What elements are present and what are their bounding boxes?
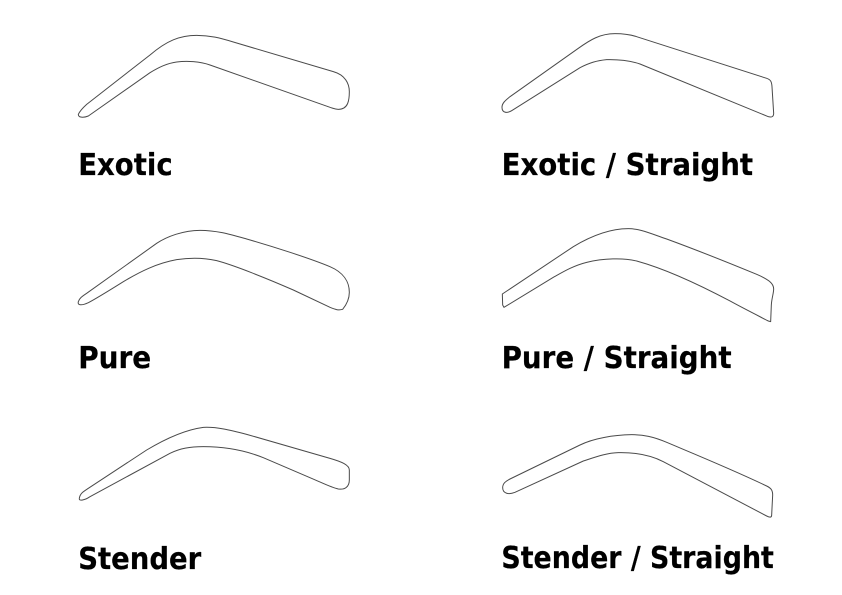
- eyebrow outline: Exotic / Straight: [502, 34, 774, 117]
- eyebrow outline: Pure: [78, 230, 349, 310]
- panel: Pure: [78, 230, 349, 376]
- panel: Stender: [78, 427, 349, 577]
- label: Exotic: Exotic: [78, 148, 173, 183]
- eyebrow outline: Stender: [79, 427, 349, 500]
- panel: Stender / Straight: [501, 435, 774, 576]
- panel: Exotic / Straight: [502, 34, 774, 183]
- eyebrow outline: Pure / Straight: [502, 229, 774, 322]
- label: Pure / Straight: Pure / Straight: [502, 341, 732, 376]
- eyebrow outline: Stender / Straight: [503, 435, 773, 517]
- panel: Exotic: [78, 35, 349, 183]
- label: Stender: Stender: [78, 542, 201, 577]
- eyebrow outline: Exotic: [78, 35, 349, 117]
- label: Exotic / Straight: Exotic / Straight: [502, 148, 753, 183]
- panel: Pure / Straight: [502, 229, 774, 376]
- label: Pure: Pure: [78, 341, 151, 376]
- label: Stender / Straight: Stender / Straight: [501, 541, 774, 576]
